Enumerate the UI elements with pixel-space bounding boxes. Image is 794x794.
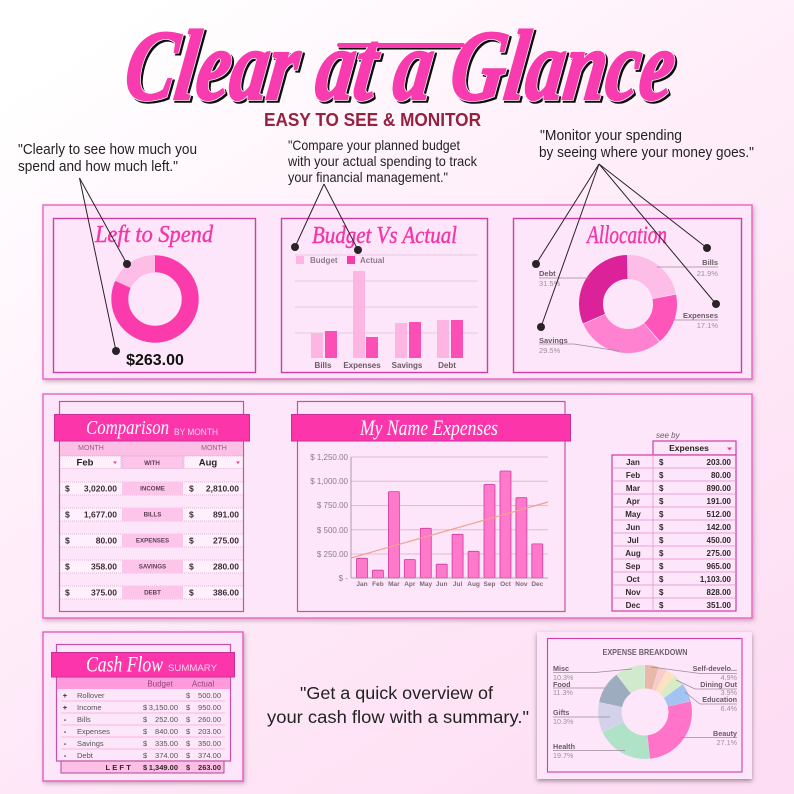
cash flow total row: LEFT [105, 763, 133, 772]
table: see by expenses: Sep [626, 562, 640, 571]
comparison row: savings: SAVINGS [139, 564, 166, 570]
heading band: expenses [292, 414, 570, 441]
heading: expense breakdown: EXPENSE BREAKDOWN [602, 647, 688, 657]
callout: budget vs actual: your financial management." [288, 169, 448, 185]
table: see by expenses: 450.00 [707, 536, 732, 545]
cash flow rows: Savings [77, 739, 104, 748]
comparison row: income: INCOME [140, 486, 165, 492]
cash flow rows: + [63, 703, 68, 712]
callout: left to spend: "Clearly to see how much you [18, 142, 197, 158]
table: see by expenses: 828.00 [707, 588, 732, 597]
bar chart: monthly expenses [310, 453, 548, 588]
table: see by expenses: Mar [626, 484, 640, 493]
labels: allocation: 31.5% [539, 279, 561, 288]
comparison row: expenses: $ [65, 536, 70, 546]
labels: expense breakdown: 3.9% [721, 688, 738, 697]
comparison row: expenses: 80.00 [96, 536, 117, 546]
heading band: cash flow: SUMMARY [168, 663, 218, 674]
cash flow rows: + [63, 691, 68, 700]
cash flow rows: $ [143, 703, 148, 712]
table: see by expenses: Feb [626, 471, 640, 480]
comparison row: income [60, 482, 243, 495]
callout: cash flow summary: your cash flow with a summary." [267, 707, 529, 727]
table: see by expenses: Dec [626, 601, 641, 610]
pointer arrows: budget vs actual [291, 184, 362, 254]
month selector row: Feb [77, 458, 94, 468]
table: see by expenses: 512.00 [707, 510, 732, 519]
callout: budget vs actual: "Compare your planned budget [288, 137, 460, 153]
table: see by expenses: 80.00 [711, 471, 732, 480]
cash flow rows: 335.00 [155, 739, 178, 748]
heading band: cash flow [52, 652, 234, 677]
month header row: MONTH [201, 445, 227, 452]
labels: expense breakdown: 10.3% [553, 673, 574, 682]
table: see by expenses: 275.00 [707, 549, 732, 558]
cash flow rows: $ [143, 751, 148, 760]
cash flow rows: Debt [77, 751, 94, 760]
bar chart: monthly expenses: Oct [500, 581, 512, 588]
cash flow rows: 840.00 [155, 727, 178, 736]
bar chart: monthly expenses: May [419, 581, 433, 588]
bar chart: monthly expenses: Sep [484, 581, 495, 588]
bar chart: monthly expenses: $ 250.00 [317, 550, 349, 559]
cash flow header row: Actual [192, 680, 214, 688]
labels: expense breakdown: Gifts [553, 708, 569, 717]
cash flow header row [57, 677, 230, 689]
table: see by expenses: $ [659, 575, 664, 584]
callout: cash flow summary [267, 683, 529, 727]
comparison row: debt [60, 586, 243, 599]
panel: my name expenses [292, 402, 570, 612]
comparison row: income: 3,020.00 [84, 484, 117, 494]
month selector row: Aug [199, 458, 217, 468]
comparison row: income: $ [65, 484, 70, 494]
callout: budget vs actual: with your actual spending to track [287, 153, 478, 169]
bar chart [295, 255, 478, 370]
bar chart: monthly expenses: $ 1,250.00 [310, 453, 349, 462]
bar chart: monthly expenses: $ 1,000.00 [310, 477, 349, 486]
cash flow total row: 263.00 [198, 763, 221, 772]
bar chart: monthly expenses: Nov [515, 581, 528, 588]
labels: expense breakdown: Food [553, 680, 571, 689]
callout: allocation: by seeing where your money goes." [539, 145, 754, 161]
cash flow rows: Expenses [77, 727, 110, 736]
legend [296, 256, 384, 265]
heading band: comparison: Comparison [86, 417, 169, 439]
cash flow rows: $ [186, 691, 191, 700]
bar chart: monthly expenses: Mar [388, 581, 400, 588]
bar chart: monthly expenses: $ 500.00 [317, 526, 349, 535]
cash flow rows: Income [77, 703, 102, 712]
panel: left to spend [54, 218, 256, 372]
table: see by expenses: $ [659, 601, 664, 610]
table: see by expenses: May [625, 510, 641, 519]
cash flow rows: Rollover [77, 691, 105, 700]
comparison row: debt: 375.00 [91, 588, 117, 598]
cash flow rows: 252.00 [155, 715, 178, 724]
bar chart: monthly expenses: Jun [436, 581, 448, 588]
bar chart: monthly expenses: Jan [356, 581, 368, 588]
cash flow rows: $ [186, 715, 191, 724]
panel: cash flow summary [43, 632, 243, 781]
labels: expense breakdown: Dining Out [700, 680, 738, 689]
panel: comparison by month [54, 402, 250, 612]
panel: monthly [43, 394, 752, 618]
bar chart: monthly expenses: Aug [467, 581, 480, 588]
heading band: comparison [54, 414, 250, 441]
table: see by expenses: $ [659, 562, 664, 571]
bar chart: Debt [438, 361, 456, 370]
table: see by expenses: $ [659, 458, 664, 467]
labels: expense breakdown: 27.1% [717, 738, 738, 747]
donut: allocation [591, 267, 665, 341]
pointer arrows: left to spend [80, 178, 131, 355]
cash flow rows: $ [143, 727, 148, 736]
table: see by expenses: $ [659, 588, 664, 597]
month header row: MONTH [78, 445, 104, 452]
bar chart: monthly expenses: Feb [372, 581, 384, 588]
labels: expense breakdown [553, 664, 738, 760]
cash flow header row: Budget [147, 680, 173, 688]
labels: allocation: Expenses [683, 311, 718, 320]
table: see by expenses: 890.00 [707, 484, 732, 493]
comparison row: expenses: EXPENSES [136, 538, 169, 544]
bar chart: monthly expenses: Dec [531, 581, 544, 588]
labels: expense breakdown: Health [553, 742, 575, 751]
donut: expense breakdown [610, 677, 680, 747]
bar chart: monthly expenses: Jul [453, 581, 462, 588]
comparison row: bills [60, 508, 243, 521]
month selector row: WITH [144, 460, 160, 467]
labels: allocation: 21.9% [697, 269, 718, 278]
table: see by expenses: 191.00 [707, 497, 732, 506]
labels: expense breakdown: Education [702, 695, 737, 704]
labels: expense breakdown: Misc [553, 664, 569, 673]
heading: budget vs actual: Budget Vs Actual [312, 223, 457, 249]
table: see by expenses: Jun [626, 523, 640, 532]
panel: expense breakdown [537, 632, 752, 779]
comparison row: income: 2,810.00 [206, 484, 239, 494]
comparison row: bills: 1,677.00 [84, 510, 117, 520]
comparison row: income: $ [189, 484, 194, 494]
table: see by expenses: 351.00 [707, 601, 732, 610]
table: see by expenses: 1,103.00 [700, 575, 732, 584]
table: see by expenses: $ [659, 523, 664, 532]
cash flow rows [61, 691, 225, 760]
labels: allocation: Debt [539, 269, 556, 278]
table: see by expenses: Jan [626, 458, 640, 467]
cash flow rows: $ [186, 739, 191, 748]
heading band: comparison: BY MONTH [174, 427, 218, 438]
comparison row: savings: 358.00 [91, 562, 117, 572]
heading: left to spend: Left to Spend [94, 222, 214, 248]
month header row [60, 441, 243, 456]
bar chart: Savings [392, 361, 423, 370]
table: see by expenses: see by [656, 431, 681, 440]
comparison row: savings [60, 560, 243, 573]
labels: expense breakdown: 19.7% [553, 751, 574, 760]
cash flow rows: 950.00 [198, 703, 221, 712]
heading: allocation: Allocation [585, 222, 667, 249]
month selector row [60, 456, 243, 468]
table: see by expenses: $ [659, 510, 664, 519]
cash flow total row: $ [186, 763, 191, 772]
cash flow rows: $ [186, 751, 191, 760]
comparison row: expenses [60, 534, 243, 547]
comparison row: expenses: 275.00 [213, 536, 239, 546]
labels: expense breakdown: 6.4% [721, 704, 738, 713]
cash flow rows: $ [186, 703, 191, 712]
bar chart: monthly expenses: $ 750.00 [317, 501, 349, 510]
panel: budget vs actual [282, 218, 488, 372]
comparison row: debt: $ [65, 588, 70, 598]
table: see by expenses: 142.00 [707, 523, 732, 532]
comparison row: debt: $ [189, 588, 194, 598]
table: see by expenses [612, 431, 736, 611]
table: see by expenses: Expenses [669, 443, 709, 453]
labels: allocation: Bills [702, 258, 718, 267]
comparison row: bills: BILLS [144, 512, 161, 518]
panel: overview [43, 205, 752, 379]
cash flow rows: $ [143, 715, 148, 724]
cash flow rows: 350.00 [198, 739, 221, 748]
bar chart: Bills [315, 361, 332, 370]
cash flow rows: $ [186, 727, 191, 736]
table: see by expenses: $ [659, 497, 664, 506]
labels: expense breakdown: Self-develo... [693, 664, 737, 673]
table: see by expenses: 203.00 [707, 458, 732, 467]
comparison row: debt: DEBT [144, 590, 161, 596]
donut: left to spend [120, 264, 190, 334]
panel: allocation [514, 218, 742, 372]
cash flow rows: - [64, 727, 67, 736]
table: see by expenses: Jul [627, 536, 639, 545]
comparison row: debt: 386.00 [213, 588, 239, 598]
comparison row: savings: 280.00 [213, 562, 239, 572]
cash flow rows: 3,150.00 [149, 703, 178, 712]
table: see by expenses: Nov [625, 588, 641, 597]
labels: allocation: 17.1% [697, 321, 718, 330]
cash flow total row: 1,349.00 [149, 763, 178, 772]
legend: Budget [310, 256, 338, 265]
table: see by expenses: $ [659, 471, 664, 480]
cash flow rows: - [64, 739, 67, 748]
callout: left to spend [18, 142, 197, 175]
table: see by expenses: 965.00 [707, 562, 732, 571]
labels: allocation: 29.5% [539, 346, 561, 355]
cash flow rows: 500.00 [198, 691, 221, 700]
comparison row: savings: $ [189, 562, 194, 572]
callout: left to spend: spend and how much left." [18, 159, 178, 175]
comparison row: bills: $ [189, 510, 194, 520]
labels: expense breakdown: 11.3% [553, 688, 573, 697]
callout: allocation: "Monitor your spending [540, 128, 682, 144]
heading band: cash flow: Cash Flow [86, 652, 163, 676]
labels: allocation [539, 258, 718, 355]
table: see by expenses: $ [659, 536, 664, 545]
cash flow rows: 374.00 [198, 751, 221, 760]
subtitle: EASY TO SEE & MONITOR [264, 110, 481, 130]
cash flow rows: 203.00 [198, 727, 221, 736]
labels: expense breakdown: Beauty [713, 729, 737, 738]
table: see by expenses: Oct [626, 575, 640, 584]
callout: cash flow summary: "Get a quick overview of [300, 683, 493, 703]
cash flow rows: 374.00 [155, 751, 178, 760]
amount left: $263.00 [126, 352, 184, 369]
table: see by expenses: Apr [626, 497, 640, 506]
cash flow rows: - [64, 751, 67, 760]
bar chart: Expenses [343, 361, 381, 370]
table: see by expenses: $ [659, 484, 664, 493]
cash flow rows: Bills [77, 715, 91, 724]
table: see by expenses: $ [659, 549, 664, 558]
labels: expense breakdown: 4.9% [721, 673, 738, 682]
callout: allocation [539, 128, 754, 161]
labels: allocation: Savings [539, 336, 568, 345]
cash flow total row [61, 761, 224, 773]
heading band: expenses: My Name Expenses [359, 415, 498, 440]
comparison row: bills: 891.00 [213, 510, 239, 520]
callout: budget vs actual [287, 137, 478, 185]
cash flow rows: - [64, 715, 67, 724]
cash flow total row: $ [143, 763, 148, 772]
pointer arrows: allocation [532, 164, 720, 331]
legend: Actual [360, 256, 384, 265]
cash flow rows: $ [143, 739, 148, 748]
comparison row: expenses: $ [189, 536, 194, 546]
bar chart: monthly expenses: Apr [404, 581, 416, 588]
labels: expense breakdown: 10.3% [553, 717, 574, 726]
comparison row: savings: $ [65, 562, 70, 572]
bar chart: monthly expenses: $ - [339, 574, 348, 583]
comparison row: bills: $ [65, 510, 70, 520]
cash flow rows: 260.00 [198, 715, 221, 724]
table: see by expenses: Aug [625, 549, 641, 558]
